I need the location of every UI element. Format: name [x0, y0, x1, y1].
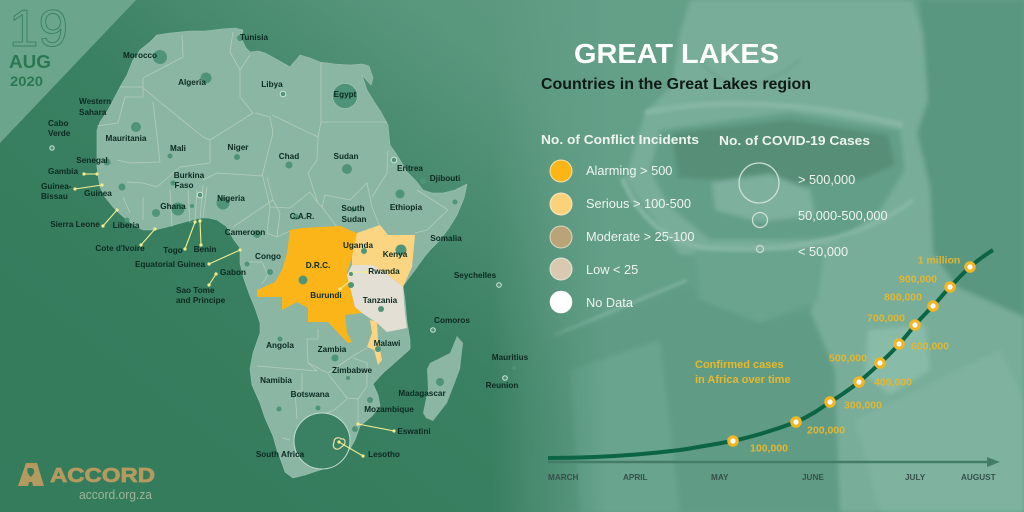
milestone labels: 500,000	[829, 352, 867, 364]
country labels: Mauritius	[492, 353, 529, 362]
swatch: moderate: Moderate > 25-100	[586, 229, 694, 244]
milestone labels: 300,000	[844, 400, 882, 412]
country labels: Eswatini	[397, 427, 431, 436]
South Africa inset circle	[294, 413, 350, 469]
country labels: Botswana	[291, 390, 330, 399]
left-aligned multi-line country labels: Verde	[48, 129, 71, 138]
country labels: South	[341, 204, 365, 213]
country labels: Benin	[194, 245, 216, 254]
size: medium	[752, 208, 888, 228]
milestone labels: 700,000	[867, 312, 905, 324]
month labels: JULY	[905, 473, 926, 482]
size: large: > 500,000	[798, 172, 855, 187]
country labels: Uganda	[343, 241, 373, 250]
country labels	[48, 33, 529, 459]
country labels: Comoros	[434, 316, 470, 325]
milestone labels: 1 million	[918, 254, 960, 266]
milestone labels: 900,000	[899, 274, 937, 286]
milestone labels: 200,000	[807, 424, 845, 436]
map of Africa	[41, 28, 529, 478]
chart caption: Confirmed cases	[695, 359, 784, 371]
country labels: Algeria	[178, 78, 206, 87]
logo url: accord.org.za	[79, 488, 152, 502]
milestone labels: 400,000	[874, 376, 912, 388]
country labels: Zimbabwe	[332, 366, 372, 375]
date: month: AUG	[9, 52, 51, 72]
country labels: Tunisia	[240, 33, 268, 42]
swatch: alarming: Alarming > 500	[586, 163, 672, 178]
country labels: Eritrea	[397, 164, 423, 173]
swatch: serious	[550, 193, 691, 215]
curve milestones	[729, 263, 974, 445]
month labels: JUNE	[802, 473, 824, 482]
country labels: Chad	[279, 152, 299, 161]
date: year: 2020	[10, 74, 43, 89]
left-aligned multi-line country labels: Cabo	[48, 119, 68, 128]
country labels: Togo	[163, 246, 183, 255]
country labels: Egypt	[334, 90, 357, 99]
country labels: Cameroon	[225, 228, 265, 237]
milestone labels: 600,000	[911, 340, 949, 352]
milestone labels: 800,000	[884, 292, 922, 304]
country labels: Ethiopia	[390, 203, 423, 212]
month labels: AUGUST	[961, 473, 996, 482]
legend: COVID-19 cases	[719, 134, 888, 259]
country labels: Faso	[174, 181, 194, 190]
country labels: Gabon	[220, 268, 246, 277]
left-aligned multi-line country labels	[41, 97, 226, 305]
island: Madagascar	[423, 336, 463, 421]
swatch: alarming	[550, 160, 672, 182]
country labels: Djibouti	[430, 174, 460, 183]
logo icon	[18, 463, 44, 486]
swatch: low	[550, 258, 638, 280]
swatch: moderate	[550, 226, 694, 248]
swatch: no data	[550, 291, 634, 313]
country labels: Morocco	[123, 51, 157, 60]
country: Malawi (serious)	[367, 320, 382, 365]
country labels: Congo	[255, 252, 281, 261]
left-aligned multi-line country labels: Bissau	[41, 192, 68, 201]
size: medium: 50,000-500,000	[798, 208, 888, 223]
country labels: Nigeria	[217, 194, 245, 203]
country labels: Libya	[261, 80, 283, 89]
country labels: Gambia	[48, 167, 78, 176]
country labels: Guinea	[84, 189, 112, 198]
country labels: Cote d'Ivoire	[95, 244, 145, 253]
size: large	[739, 163, 855, 203]
country labels: Liberia	[113, 221, 140, 230]
left-aligned multi-line country labels: Sahara	[79, 108, 107, 117]
country labels: Mozambique	[364, 405, 414, 414]
month labels: MARCH	[548, 473, 579, 482]
size: small	[756, 244, 848, 259]
leader lines	[73, 172, 396, 458]
country labels: Mauritania	[106, 134, 147, 143]
country: Uganda and Kenya (serious)	[352, 225, 415, 287]
chart caption	[695, 359, 791, 386]
country labels: Lesotho	[368, 450, 400, 459]
left-aligned multi-line country labels: Guinea-	[41, 182, 72, 191]
country labels: Madagascar	[398, 389, 446, 398]
left-aligned multi-line country labels: and Principe	[176, 296, 226, 305]
date: day: 19	[9, 0, 68, 58]
country: D.R.C. (alarming)	[257, 226, 362, 343]
land mass	[97, 28, 467, 478]
country labels: Namibia	[260, 376, 292, 385]
country labels: C.A.R.	[290, 212, 314, 221]
month labels: APRIL	[623, 473, 648, 482]
country labels: Tanzania	[363, 296, 398, 305]
country labels: South Africa	[256, 450, 305, 459]
country labels: Seychelles	[454, 271, 497, 280]
country labels: Somalia	[430, 234, 462, 243]
country labels: Rwanda	[368, 267, 400, 276]
country labels: Sierra Leone	[50, 220, 100, 229]
country labels: Kenya	[383, 250, 408, 259]
title: GREAT LAKES	[574, 38, 779, 69]
swatch: low: Low < 25	[586, 262, 638, 277]
month labels: MAY	[711, 473, 729, 482]
milestone labels	[750, 254, 960, 454]
country labels: Burkina	[174, 171, 205, 180]
country labels: Reunion	[486, 381, 518, 390]
legend: conflict incidents	[541, 133, 699, 313]
swatch: no data: No Data	[586, 295, 634, 310]
country: Tanzania (low)	[347, 265, 407, 332]
legend heading: conflict: No. of Conflict Incidents	[541, 133, 699, 147]
country labels: Sudan	[341, 215, 367, 224]
country labels: Senegal	[76, 156, 108, 165]
left-aligned multi-line country labels: Western	[79, 97, 111, 106]
legend heading: covid: No. of COVID-19 Cases	[719, 134, 870, 148]
growth curve	[548, 250, 993, 458]
country labels: Burundi	[310, 291, 342, 300]
subtitle: Countries in the Great Lakes region	[541, 76, 811, 93]
country labels: D.R.C.	[306, 261, 330, 270]
country labels: Niger	[228, 143, 249, 152]
month labels	[548, 473, 996, 482]
country labels: Angola	[266, 341, 294, 350]
country labels: Zambia	[318, 345, 347, 354]
country labels: Malawi	[374, 339, 400, 348]
photo: health worker in protective gear	[490, 0, 1024, 512]
chart caption: in Africa over time	[695, 374, 791, 386]
country labels: Mali	[170, 144, 186, 153]
line chart: confirmed cases over time	[548, 250, 1000, 482]
left-aligned multi-line country labels: Sao Tome	[176, 286, 215, 295]
logo: ACCORD	[18, 463, 155, 502]
milestone labels: 100,000	[750, 442, 788, 454]
country labels: Ghana	[160, 202, 186, 211]
COVID-19 case bubbles	[50, 35, 516, 432]
country labels: Equatorial Guinea	[135, 260, 205, 269]
swatch: serious: Serious > 100-500	[586, 196, 691, 211]
chart axis arrow	[548, 457, 1000, 467]
country borders	[97, 32, 448, 440]
logo wordmark: ACCORD	[50, 465, 155, 487]
country: Lesotho	[333, 438, 345, 449]
date corner panel	[0, 0, 136, 143]
size: small: < 50,000	[798, 244, 848, 259]
country labels: Sudan	[333, 152, 359, 161]
